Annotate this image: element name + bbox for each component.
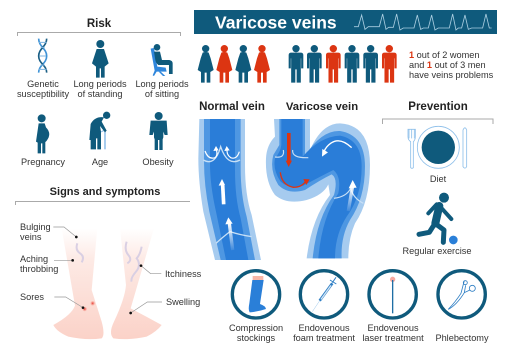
icon: DNA — [39, 39, 47, 73]
icon: sitting — [151, 44, 173, 76]
label: foam treatment: Endovenous — [298, 323, 350, 333]
label: age: Age — [92, 157, 108, 167]
panel: normal vein — [198, 101, 265, 260]
statistic text: 1 out of 3 men — [427, 60, 486, 70]
label: bulging veins: Bulging — [20, 222, 51, 232]
icon: obesity — [149, 112, 168, 150]
title banner — [194, 10, 497, 34]
label: aching throbbing: throbbing — [20, 264, 58, 274]
heading: risk: Risk — [87, 18, 112, 30]
panel: signs and symptoms — [16, 186, 202, 339]
label: long periods of standing: Long periods — [73, 79, 127, 89]
label: foam treatment: foam treatment — [293, 333, 355, 343]
illustration: normal vein — [198, 119, 261, 260]
icon: foam treatment — [300, 271, 348, 318]
panel: treatments — [229, 271, 489, 343]
illustration: legs — [53, 227, 162, 339]
heading: signs and symptoms: Signs and symptoms — [50, 186, 160, 198]
icon: laser treatment — [369, 271, 416, 318]
panel: risk — [17, 18, 189, 167]
men pictogram — [289, 45, 397, 83]
heading: normal vein: Normal vein — [199, 101, 265, 113]
statistic text: 1 out of 2 women — [409, 50, 480, 60]
label: obesity: Obesity — [142, 157, 174, 167]
icon: heartbeat line — [354, 14, 492, 30]
statistic text: and — [409, 60, 427, 70]
icon: regular exercise — [419, 193, 458, 244]
label: long periods of sitting: Long periods — [135, 79, 189, 89]
panel: prevention — [382, 101, 493, 256]
icon: age — [89, 112, 110, 149]
label: diet: Diet — [430, 174, 447, 184]
label: swelling: Swelling — [166, 297, 200, 307]
label: phlebectomy: Phlebectomy — [435, 333, 489, 343]
heading: prevention: Prevention — [408, 101, 468, 113]
label: genetic susceptibility: susceptibility — [17, 89, 69, 99]
icon: compression stockings — [232, 271, 280, 318]
panel: varicose vein — [266, 101, 370, 258]
label: regular exercise: Regular exercise — [403, 246, 471, 256]
label: genetic susceptibility: Genetic — [27, 79, 59, 89]
label: bulging veins: veins — [20, 232, 42, 242]
icon: phlebectomy — [438, 271, 485, 318]
label: compression stockings: stockings — [237, 333, 276, 343]
label: pregnancy: Pregnancy — [21, 157, 65, 167]
label: laser treatment: laser treatment — [362, 333, 424, 343]
icon: standing — [92, 40, 109, 78]
label: compression stockings: Compression — [229, 323, 283, 333]
icon: diet plate — [408, 126, 467, 168]
label: itchiness: Itchiness — [165, 269, 202, 279]
title: Varicose veins — [215, 12, 337, 32]
heading: varicose vein: Varicose vein — [286, 101, 358, 113]
label: aching throbbing: Aching — [20, 254, 48, 264]
icon: pregnancy — [36, 114, 49, 153]
women pictogram — [198, 45, 270, 83]
label: laser treatment: Endovenous — [367, 323, 419, 333]
label: sores: Sores — [20, 292, 44, 302]
label: long periods of standing: of standing — [78, 89, 122, 99]
chart: people statistics — [198, 45, 397, 83]
statistic text: have veins problems — [409, 70, 494, 80]
illustration: varicose vein — [266, 119, 370, 258]
label: long periods of sitting: of sitting — [145, 89, 179, 99]
